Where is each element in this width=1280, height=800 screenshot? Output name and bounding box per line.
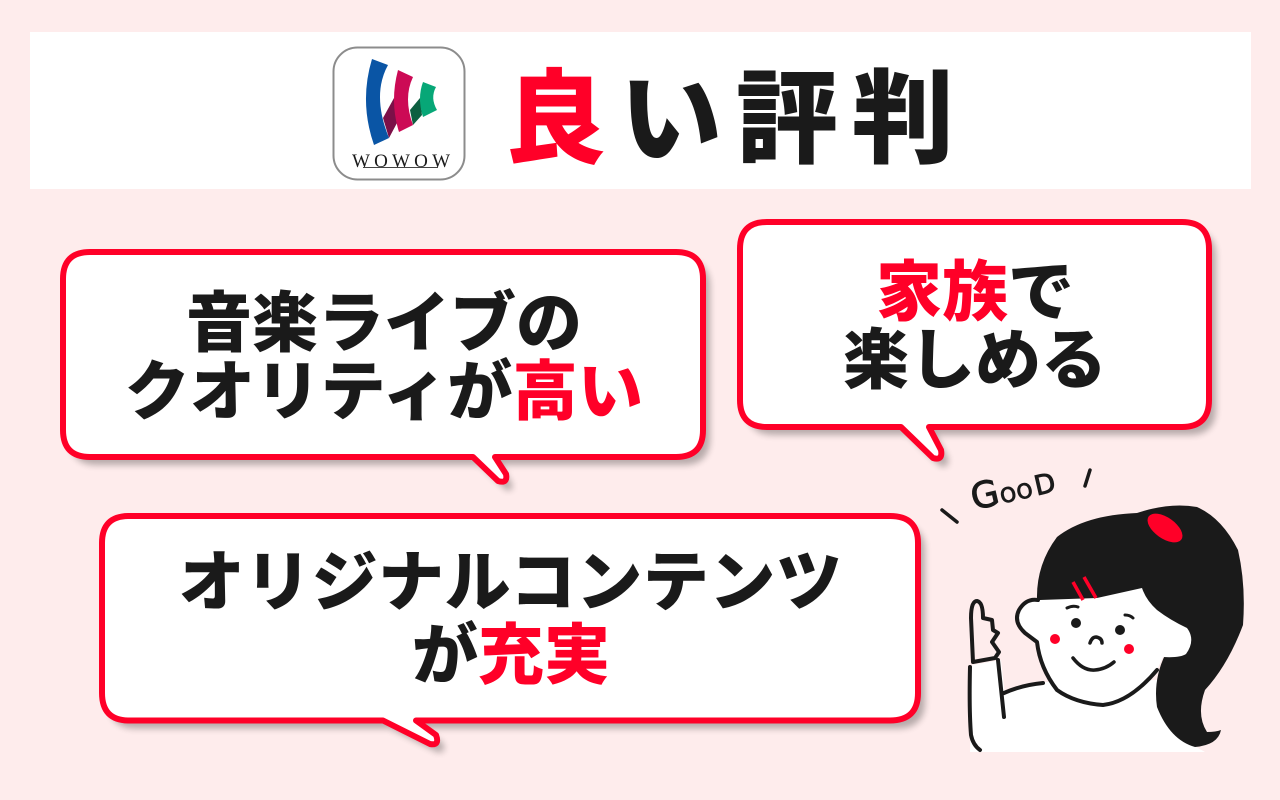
text: GOOD handwritten: GOOD <box>967 460 1059 519</box>
text: bubble 1: クオリティが高い <box>125 355 643 428</box>
cheeks <box>1050 634 1134 654</box>
icon: WOWOW logo: WOWOW <box>352 151 450 172</box>
text: bubble 2: 家族で <box>876 255 1074 329</box>
icon: WOWOW logo <box>334 48 464 180</box>
speech bubble: family <box>740 222 1216 467</box>
text: bubble 1 <box>125 286 643 428</box>
body <box>970 660 1205 752</box>
hair clip <box>1073 577 1096 600</box>
face <box>1016 588 1191 705</box>
speech bubble: music live quality <box>63 252 710 490</box>
eyes and brows <box>1067 606 1133 635</box>
text: bubble 3: が充実 <box>412 618 610 692</box>
text: bubble 3 <box>179 545 842 692</box>
hair tie <box>1143 508 1187 548</box>
title: 良い評判 <box>504 63 968 177</box>
illustration: girl giving thumbs up <box>942 460 1244 752</box>
nose and mouth <box>1073 637 1114 670</box>
text: bubble 2: 楽しめる <box>843 323 1107 397</box>
text: bubble 1: 音楽ライブの <box>186 286 582 360</box>
hair <box>1037 505 1244 747</box>
speech bubble: original content <box>102 516 925 752</box>
header band <box>30 32 1251 189</box>
text: bubble 3: オリジナルコンテンツ <box>179 545 842 619</box>
arm and thumb <box>971 601 999 662</box>
